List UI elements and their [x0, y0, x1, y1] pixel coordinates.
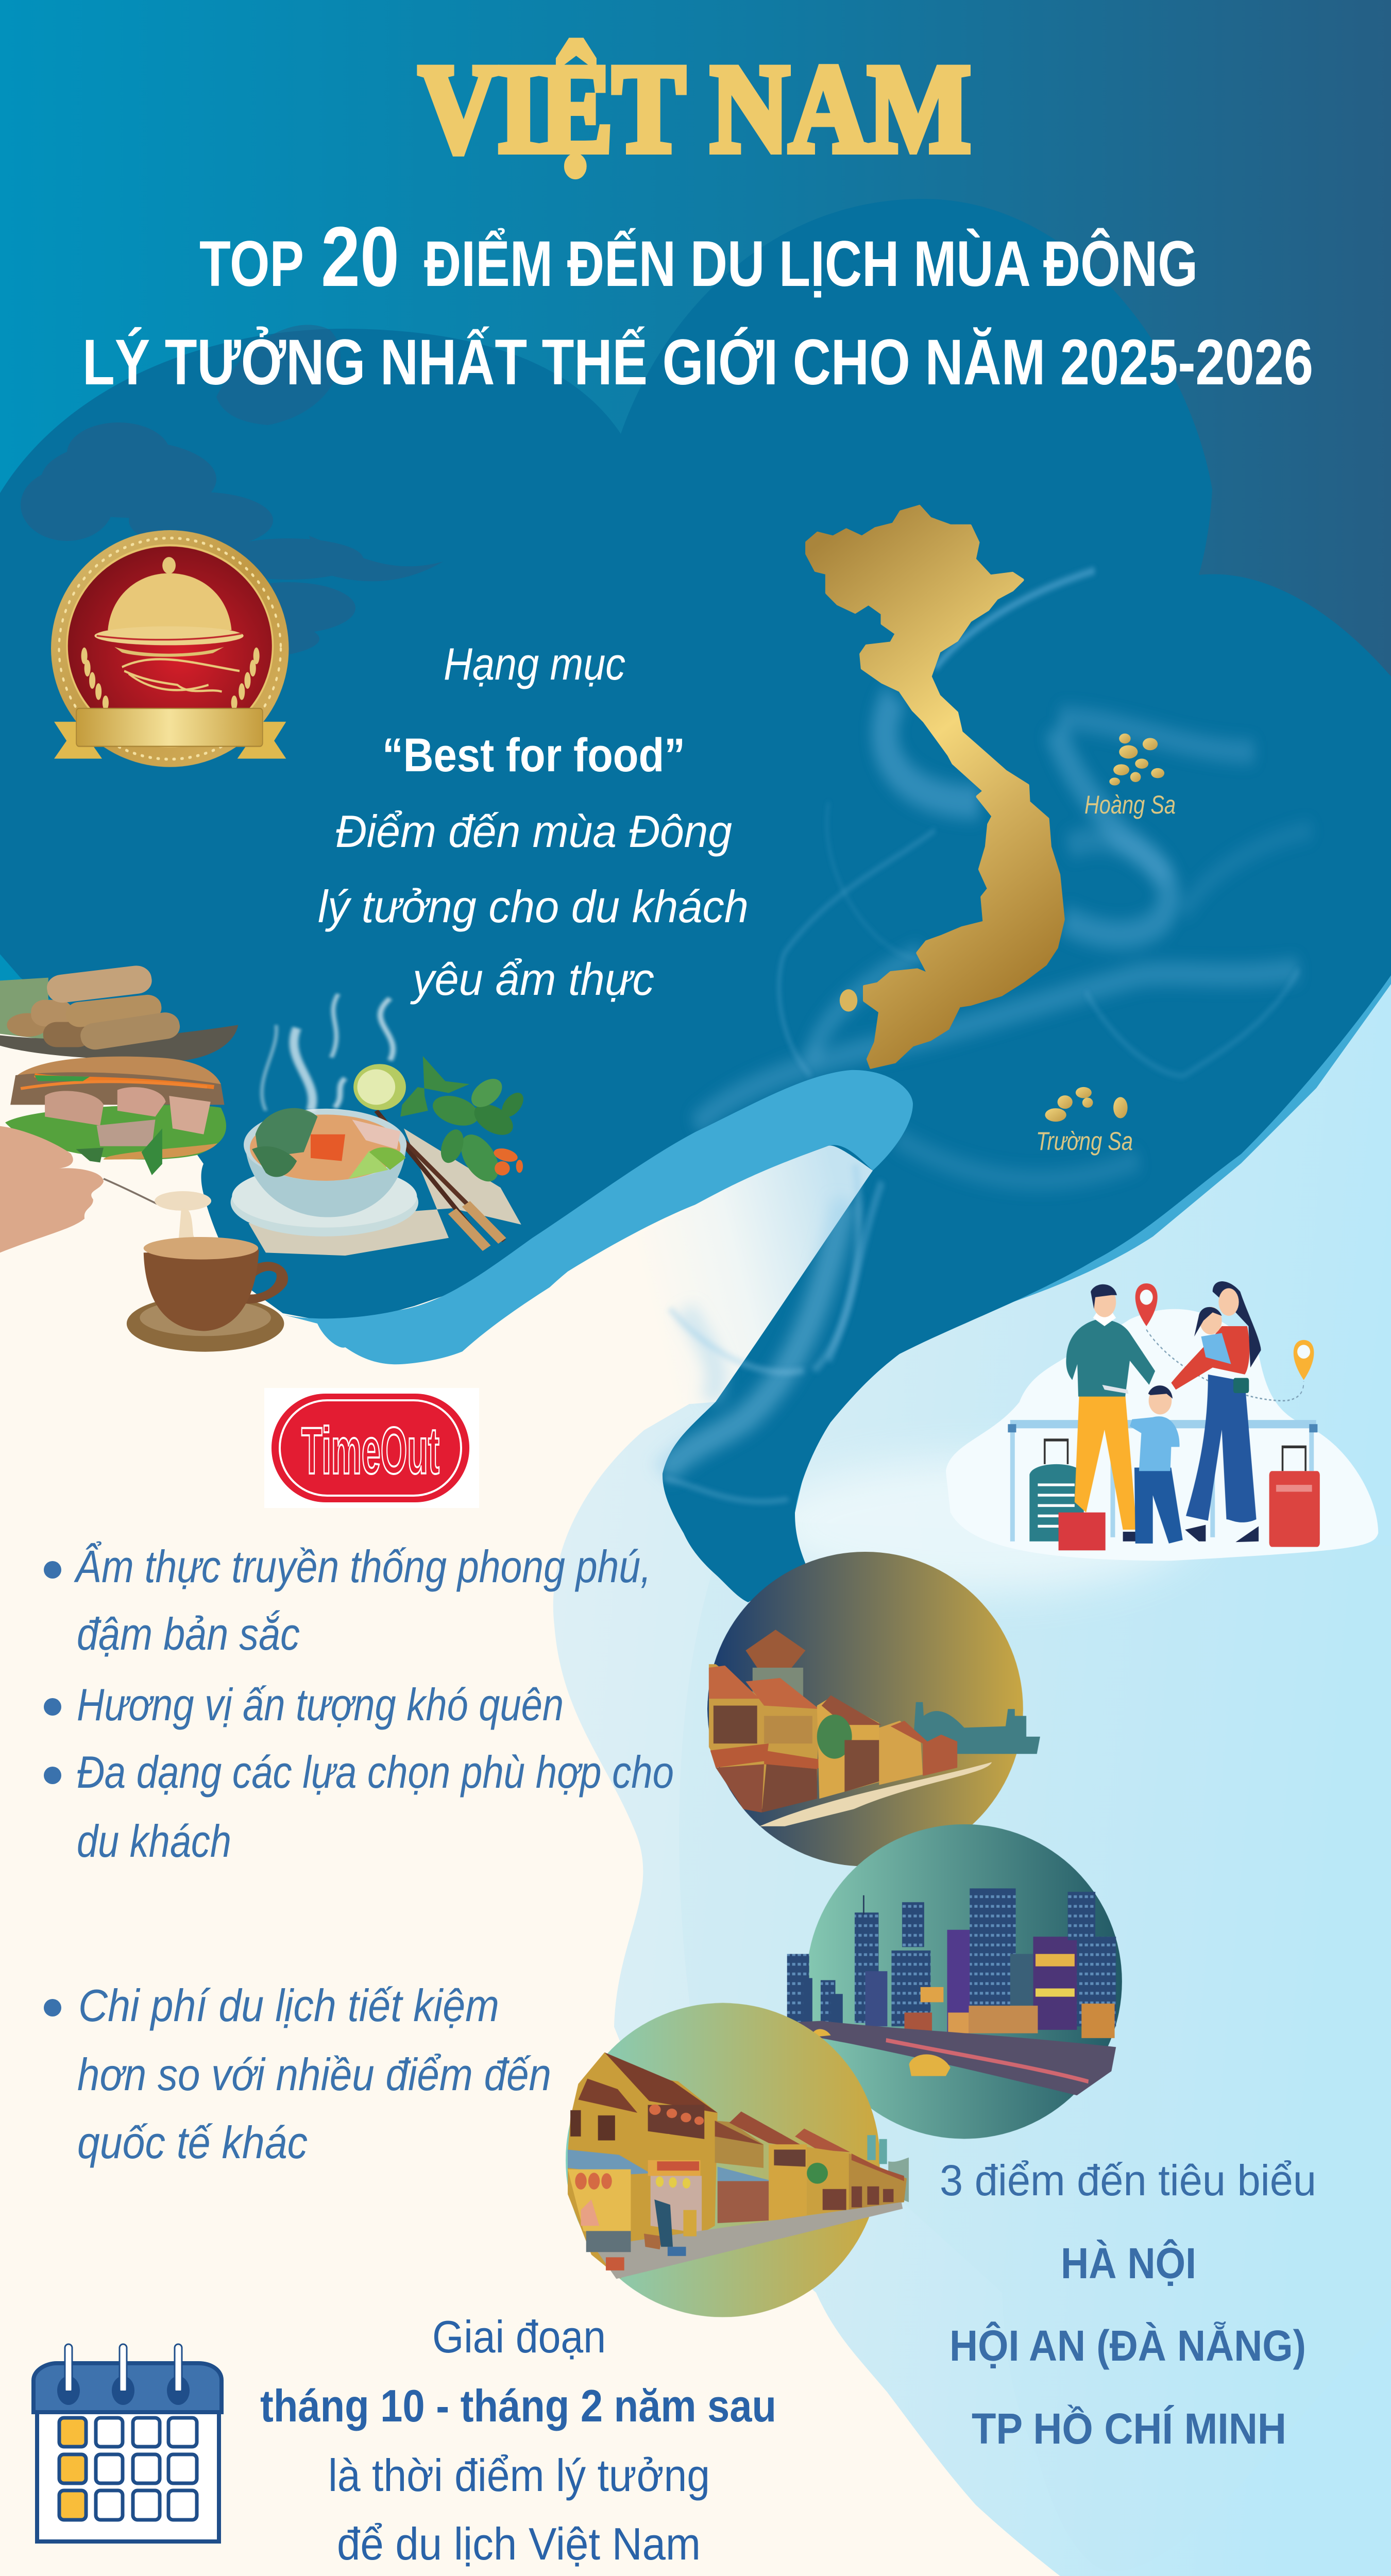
- city circle: TP Hồ Chí Minh: [778, 1824, 1122, 2139]
- text: 3 featured destinations: [940, 2156, 1316, 2453]
- boy: [1102, 1385, 1183, 1544]
- suitcase red: [1269, 1447, 1320, 1547]
- text: 3 featured destinations: HỘI AN (ĐÀ NẴNG): [949, 2321, 1306, 2370]
- icon: cloche: [94, 557, 244, 691]
- label: Trường Sa: Trường Sa: [1036, 1127, 1133, 1156]
- subtitle: [82, 209, 1313, 398]
- herbs: [400, 1056, 528, 1187]
- smoke wedge: pale mist: [453, 1145, 873, 1405]
- list: food highlights: Hương vị ấn tượng khó quên: [77, 1679, 564, 1730]
- islands: Trường Sa: [1045, 1087, 1128, 1122]
- city circle: Hội An: [566, 2003, 909, 2317]
- subtitle: TOP: [199, 228, 304, 300]
- background: inner pale wave: [679, 1520, 1391, 2571]
- list: travel cost: [44, 1980, 551, 2168]
- icon: yellow pin: [1294, 1340, 1314, 1380]
- city circle: Hà Nội: [707, 1552, 1040, 1867]
- list: travel cost: Chi phí du lịch tiết kiệm: [78, 1980, 499, 2031]
- background: soft pale glow under swirl: [762, 1458, 1195, 1592]
- decorative clouds: dragon pattern: [21, 325, 443, 659]
- coffee cup: [127, 1237, 288, 1352]
- woman: [1171, 1281, 1261, 1542]
- smoke in swirl: [663, 1164, 859, 1502]
- smoke around the map: [696, 570, 1312, 1361]
- text: Hạng mục block: Điểm đến mùa Đông: [335, 806, 732, 857]
- text: 3 featured destinations: 3 điểm đến tiêu biểu: [940, 2156, 1316, 2205]
- logo: Time Out: [264, 1388, 479, 1508]
- list: food highlights: [44, 1541, 674, 1867]
- text: best time to visit: tháng 10 - tháng 2 năm sau: [260, 2380, 776, 2431]
- list: travel cost: hơn so với nhiều điểm đến: [77, 2049, 551, 2100]
- label: Hoàng Sa: Hoàng Sa: [1084, 790, 1176, 819]
- text: 3 featured destinations: TP HỒ CHÍ MINH: [972, 2404, 1286, 2453]
- spring rolls plate: [0, 964, 238, 1061]
- list: food highlights: đậm bản sắc: [77, 1608, 300, 1659]
- list: food highlights: Ẩm thực truyền thống phong phú,: [74, 1541, 651, 1592]
- text: Hạng mục block: yêu ẩm thực: [410, 954, 654, 1005]
- steam: [262, 994, 393, 1111]
- text: 3 featured destinations: HÀ NỘI: [1061, 2239, 1196, 2287]
- hand and spoon: [0, 1126, 211, 1252]
- badge: Best for food medal: [51, 530, 289, 767]
- text: Hạng mục block: Hạng mục: [444, 638, 625, 689]
- background: top gradient: [0, 0, 1391, 1030]
- text: best time to visit: [260, 2311, 776, 2569]
- background: main dark blue wave: [0, 199, 1391, 1602]
- man: [1066, 1284, 1155, 1541]
- text: best time to visit: Giai đoạn: [432, 2311, 606, 2362]
- subtitle: 20: [321, 209, 399, 304]
- band: light blue wave tip: [284, 1070, 913, 1364]
- text: Hạng mục block: lý tưởng cho du khách: [318, 881, 749, 932]
- bowl of noodles: [231, 1064, 521, 1256]
- icon: red pin: [1135, 1283, 1158, 1326]
- text: best time to visit: là thời điểm lý tưởng: [328, 2450, 710, 2501]
- logo: Time Out: TimeOut: [301, 1414, 439, 1488]
- list: food highlights: du khách: [77, 1816, 231, 1867]
- title: VIỆT NAM: [419, 39, 971, 178]
- icon: wheat: [81, 648, 260, 710]
- subtitle: ĐIỂM ĐẾN DU LỊCH MÙA ĐÔNG: [424, 228, 1198, 300]
- background: light blue band under dark wave: [773, 969, 1391, 1513]
- list: food highlights: Đa dạng các lựa chọn phù hợp cho: [77, 1747, 674, 1798]
- islands: Hoàng Sa: [1109, 734, 1164, 786]
- text: Hạng mục block: “Best for food”: [382, 729, 685, 782]
- icon: calendar: [33, 2344, 222, 2541]
- suitcase teal: [1029, 1440, 1084, 1541]
- illustration: food collage: [0, 964, 528, 1352]
- text: Hạng mục block: [318, 638, 749, 1005]
- illustration: travelling family: [946, 1281, 1378, 1561]
- banh mi: [5, 1057, 226, 1175]
- map: Vietnam mainland: [806, 506, 1164, 1122]
- background: light blue wave right: [553, 876, 1391, 2576]
- list: travel cost: quốc tế khác: [77, 2117, 308, 2168]
- text: best time to visit: để du lịch Việt Nam: [337, 2518, 701, 2569]
